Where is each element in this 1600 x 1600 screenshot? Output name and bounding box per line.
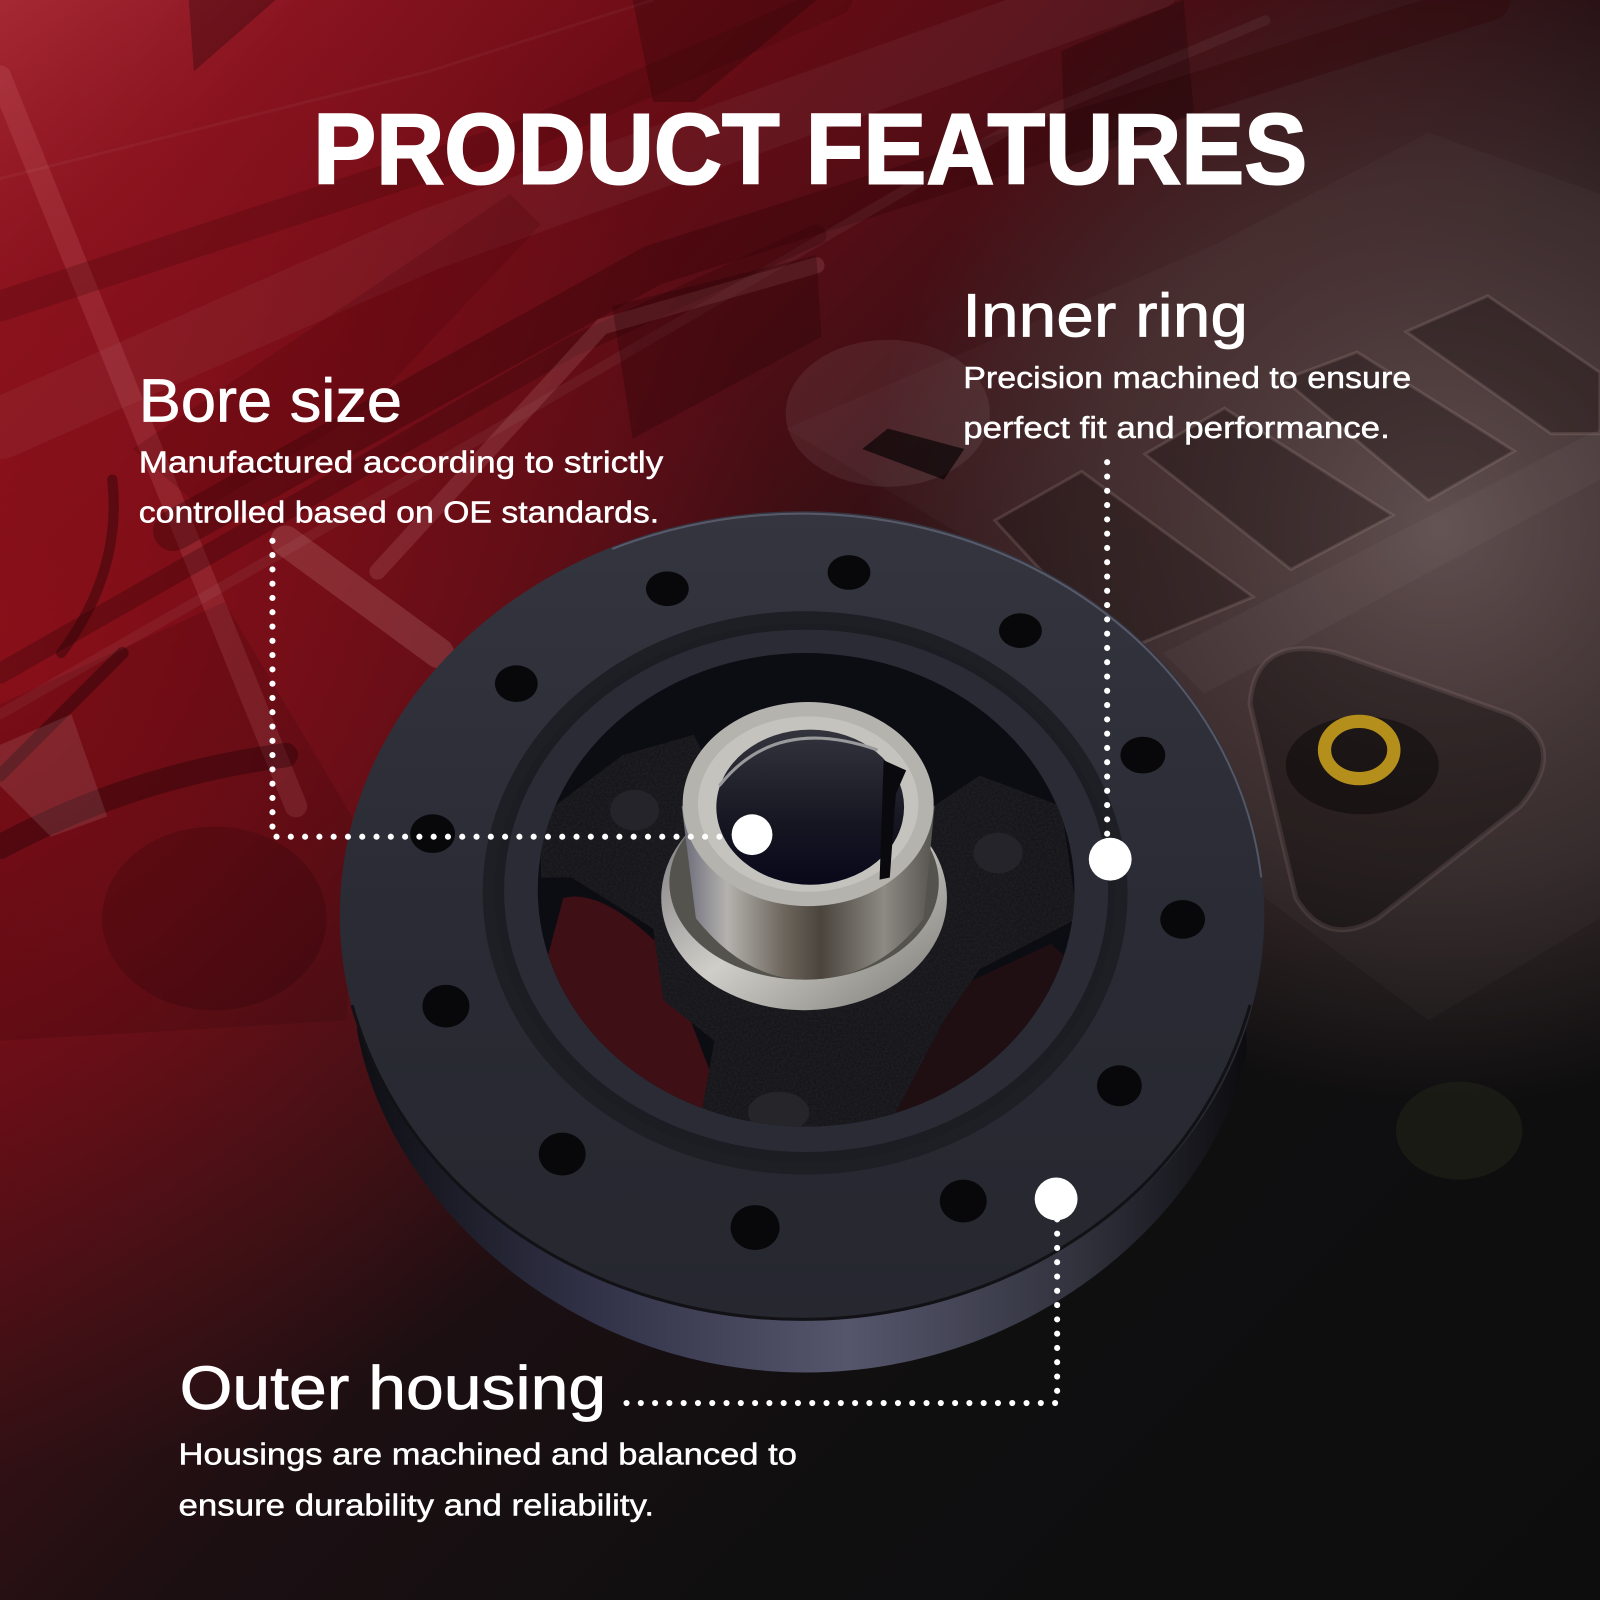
- central opening: [538, 653, 1074, 1127]
- groove ring: [489, 617, 1121, 1168]
- top face: [340, 511, 1264, 1319]
- title: PRODUCT FEATURES: [313, 94, 1307, 206]
- callout: bore size: [139, 366, 772, 855]
- text: outer housing description: [179, 1437, 797, 1522]
- text: bore size description: controlled based on OE standards.: [139, 495, 659, 529]
- text: bore size description: [139, 445, 664, 529]
- heading: bore size: Bore size: [139, 366, 402, 434]
- outer housing side wall: [357, 969, 1247, 1372]
- radiator cap: [1396, 1082, 1522, 1180]
- marker: inner ring: [1089, 838, 1132, 881]
- callout: outer housing: [179, 1178, 1078, 1522]
- see-through windows: [548, 896, 726, 1116]
- text: inner ring description: [963, 361, 1411, 445]
- marker: bore size: [732, 814, 772, 855]
- callout: inner ring: [962, 282, 1411, 881]
- dotted leader: inner ring: [1104, 462, 1110, 847]
- engine cover: [786, 133, 1600, 1020]
- text: outer housing description: ensure durability and reliability.: [179, 1488, 654, 1522]
- dotted leader: bore size: [272, 541, 730, 837]
- marker: outer housing: [1035, 1178, 1078, 1220]
- icon: yellow oil cap ring: [1324, 721, 1394, 779]
- cast hub spokes: [541, 735, 1078, 1128]
- bore of the ring: [716, 730, 904, 885]
- text: bore size description: Manufactured according to strictly: [139, 445, 664, 479]
- text: inner ring description: perfect fit and performance.: [963, 411, 1390, 445]
- oil filler recess: [1250, 649, 1544, 930]
- text: outer housing description: Housings are machined and balanced to: [179, 1437, 797, 1471]
- product: damper pulley: [340, 511, 1264, 1372]
- heading: inner ring: Inner ring: [962, 282, 1248, 350]
- text: inner ring description: Precision machined to ensure: [963, 361, 1411, 395]
- heading: outer housing: Outer housing: [180, 1354, 606, 1422]
- dotted leader: outer housing: [622, 1219, 1057, 1403]
- bolt holes: [410, 555, 1205, 1250]
- inner ring bushing: [661, 702, 947, 1010]
